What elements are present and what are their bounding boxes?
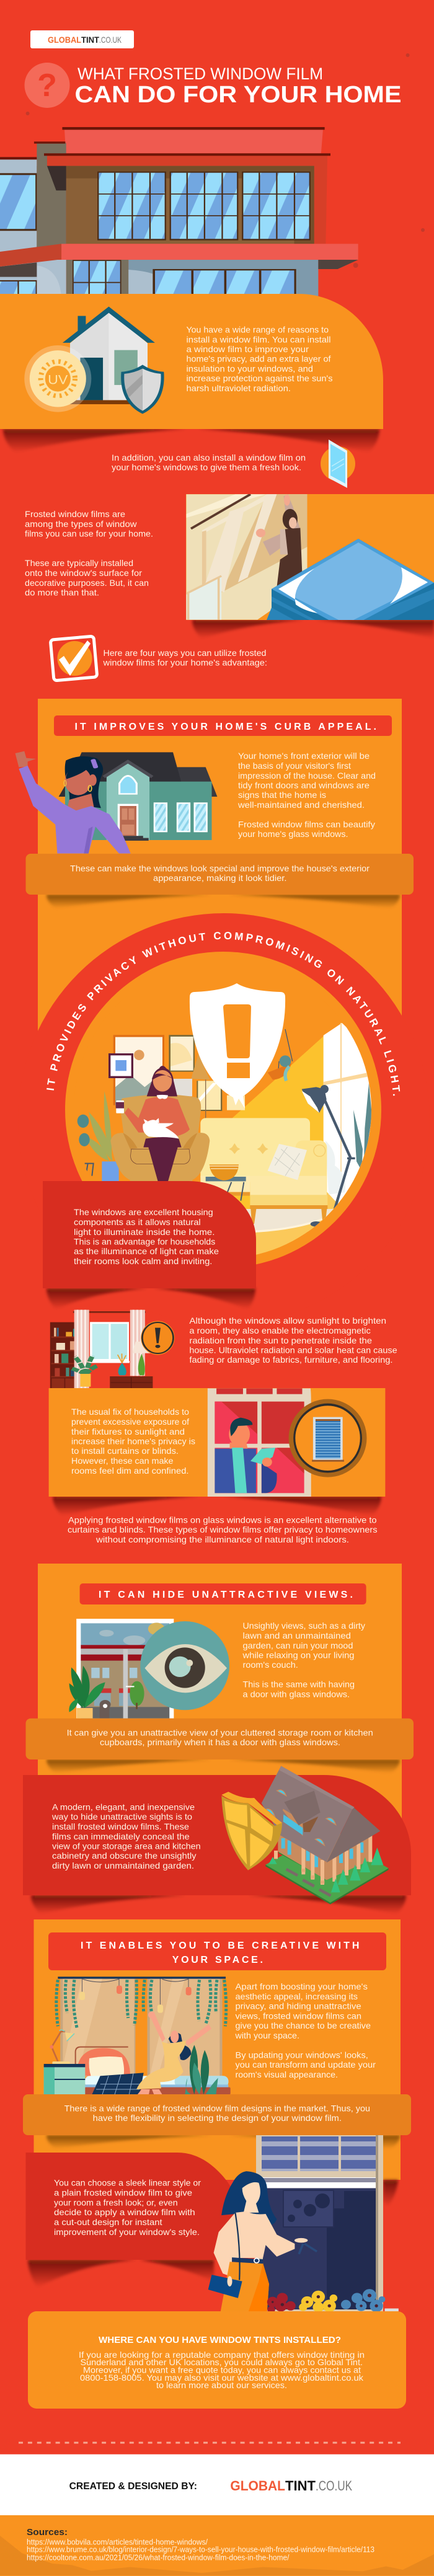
bed: [76, 2047, 231, 2094]
icon: house with UV and shield: UV: [48, 372, 68, 387]
panel: natural light text: as the illuminance of light can make: [74, 1246, 219, 1256]
panel: where to install: 0800-158-8005. You may also visit our website at www.globaltint.co.uk: [80, 2373, 364, 2383]
trees: [268, 1848, 383, 1892]
house: [59, 752, 217, 841]
text: four ways: Here are four ways you can utilize frosted: [103, 648, 267, 658]
potted plant: [185, 2045, 218, 2094]
panel: natural light text: The windows are excellent housing: [74, 1207, 213, 1217]
hanging lights: [79, 1978, 192, 2013]
text: creative paragraph: give you the chance to be creative: [236, 2021, 371, 2030]
text: creative paragraph: Apart from boosting your home's: [236, 1981, 368, 1991]
text: conceal paragraph: [51, 1802, 201, 1870]
heading: creative with your space: IT ENABLES YOU TO BE CREATIVE WITH: [81, 1941, 359, 1951]
panel: where to install: to learn more about our services.: [156, 2380, 287, 2390]
text: curtains and blinds: The usual fix of households to: [71, 1407, 189, 1417]
panel: where to install: If you are looking for a reputable company that offers window tinting in: [79, 2350, 365, 2360]
shadow: band 2: [46, 1759, 400, 1773]
nightstand: [44, 2064, 85, 2094]
panel: sources footer: https://www.bobvila.com/articles/tinted-home-windows/: [27, 2538, 208, 2547]
illustration: bedroom: [44, 1976, 231, 2094]
text: unsightly views: lawn and an unmaintained: [243, 1631, 351, 1640]
text: conceal paragraph: dirty lawn or unmaintained garden.: [52, 1861, 194, 1870]
plant and pot: [71, 1356, 97, 1387]
text: frosted films intro: These are typically installed: [25, 558, 133, 568]
text: intro paragraph: a window film to improve your: [186, 344, 309, 354]
shadow: curtains panel: [53, 1497, 381, 1516]
dormer: [279, 1790, 321, 1836]
text: intro paragraph: harsh ultraviolet radiation.: [186, 383, 291, 393]
panel: section 3 background: [38, 1564, 402, 1855]
text: intro paragraph: increase protection against the sun's: [186, 373, 332, 383]
text: creative paragraph: views, frosted window films can: [236, 2011, 361, 2021]
text: frosted films intro: films you can use for your home.: [25, 528, 153, 538]
shadow: design choices panel: [28, 2260, 214, 2288]
text: curb appeal paragraph: the basis of your visitor's first: [238, 761, 351, 771]
text: creative paragraph: [234, 1981, 376, 2079]
illustration: house and waving woman: [16, 751, 217, 854]
panel: credits: CREATED & DESIGNED BY:: [69, 2481, 197, 2492]
title: [74, 64, 402, 108]
text: conceal paragraph: A modern, elegant, and inexpensive: [52, 1802, 195, 1812]
callout band: curb appeal: These can make the windows look special and improve the house's exterior: [70, 863, 370, 873]
hanging plant: [268, 1029, 293, 1081]
roof windows: [265, 1790, 336, 1846]
text: curtains and blinds: [71, 1407, 195, 1476]
wall frames: [113, 1035, 164, 1105]
bookshelf: [50, 1322, 80, 1388]
text: curtains and blinds: increase their home's privacy is: [71, 1436, 195, 1446]
text: intro paragraph: install a window film. You can install: [186, 334, 331, 344]
text: conceal paragraph: install frosted window films. These: [52, 1821, 189, 1831]
strap: [235, 2213, 240, 2280]
door view: [76, 1619, 174, 1719]
panel: section 1 curb appeal and section 2 privacy background: [38, 699, 402, 1071]
panel: natural light text: light to illuminate inside the home.: [74, 1227, 215, 1237]
panel: where to install: Sunderland and other UK locations, you could always go to Global Tint.: [81, 2357, 363, 2367]
text: curtains and blinds: their fixtures to sunlight and: [71, 1427, 185, 1436]
icon: film stack: [267, 539, 434, 620]
small blue frame: [108, 1053, 133, 1078]
text: electromagnetic radiation: fading or damage to fabrics, furniture, and flooring.: [189, 1355, 393, 1365]
left plant: [78, 1091, 119, 1182]
heading: curb appeal: [54, 715, 392, 736]
callout band: storage view: [26, 1719, 414, 1759]
text: design choices paragraph: improvement of your window's style.: [54, 2227, 200, 2237]
blouse: [214, 2211, 294, 2276]
text: frosted films intro: among the types of window: [25, 519, 137, 529]
heading: creative with your space: [48, 1932, 386, 1970]
window: large left: [97, 172, 166, 241]
illustration: window behind woman: [256, 2135, 383, 2311]
sofa: [200, 1118, 327, 1224]
text: creative paragraph: By updating your windows' looks,: [236, 2050, 368, 2060]
heading: creative with your space: YOUR SPACE.: [172, 1955, 263, 1965]
text: unsightly views: Unsightly views, such as a dirty: [243, 1621, 365, 1631]
text: electromagnetic radiation: house. Ultraviolet radiation and solar heat can cause: [189, 1345, 397, 1355]
text: curb appeal paragraph: well-maintained and cherished.: [237, 800, 365, 810]
panel: natural light text: This is an advantage for households: [74, 1236, 215, 1246]
keys: [294, 2238, 317, 2254]
panel: natural light text: their rooms look calm and inviting.: [74, 1256, 212, 1266]
panel: intro shadow: [3, 429, 379, 453]
text: four ways: [102, 648, 267, 667]
text: design choices paragraph: [54, 2177, 201, 2237]
figure: man reading: [215, 1418, 277, 1493]
text: alternative to curtains: curtains and blinds. These types of window films offer privacy to homeowners: [68, 1525, 377, 1534]
text: frosted films intro: [25, 509, 153, 598]
text: alternative to curtains: Applying frosted window films on glass windows is an excellent alternative to: [68, 1515, 377, 1525]
text: electromagnetic radiation: a room, they also enable the electromagnetic: [189, 1326, 371, 1335]
icon: house with UV and shield: [24, 306, 164, 414]
text: design choices paragraph: a plain frosted window film to give: [54, 2187, 192, 2197]
panel shadow: installer: [192, 620, 434, 639]
skirt: [221, 2262, 269, 2311]
panel: sources footer: https://cooltone.com.au/2021/05/26/what-frosted-window-film-does-in-the-home/: [27, 2553, 290, 2562]
text: creative paragraph: with your space.: [234, 2030, 299, 2040]
shadow: band 3: [46, 2135, 400, 2149]
text: frosted films intro: onto the window's surface for: [25, 568, 142, 578]
text: intro paragraph: [186, 325, 332, 393]
title: WHAT FROSTED WINDOW FILM: [78, 64, 323, 83]
logo badge: .CO.UK: [99, 35, 122, 45]
text: curb appeal paragraph: [237, 751, 376, 839]
text: fresh look: In addition, you can also install a window film on: [112, 453, 306, 463]
callout band: storage view: It can give you an unattractive view of your cluttered storage room or kitchen: [67, 1727, 373, 1737]
text: curb appeal paragraph: signs that the home is: [238, 790, 326, 800]
text: frosted films intro: decorative purposes. But, it can: [25, 578, 149, 588]
text: alternative to curtains: without compromising the illuminance of natural light indoors.: [95, 1534, 349, 1544]
vines: [56, 1980, 226, 2029]
panel: curtains and blinds: [49, 1388, 385, 1497]
text: fresh look: [112, 453, 306, 472]
text: four ways: window films for your home's advantage:: [102, 657, 267, 667]
text: design choices paragraph: You can choose a sleek linear style or: [54, 2177, 201, 2187]
illustration: modern house: [0, 127, 358, 299]
panel: credits: GLOBAL: [230, 2478, 285, 2494]
console and vases: [110, 1342, 153, 1388]
illustration: isometric house and shield: [221, 1766, 389, 1905]
floor lamp: [302, 1085, 355, 1227]
icon: eye: [140, 1621, 229, 1710]
text: curtains and blinds: rooms feel dim and confined.: [71, 1466, 188, 1476]
icon: checkbox: [50, 636, 97, 681]
roof: [262, 1766, 380, 1862]
text: creative paragraph: privacy, and hiding unattractive: [236, 2001, 361, 2011]
logo badge: TINT: [81, 35, 99, 45]
text: design choices paragraph: a cut-out design for instant: [54, 2217, 162, 2227]
text: unsightly views: room's couch.: [243, 1660, 298, 1670]
logo badge: [30, 30, 134, 48]
text: conceal paragraph: way to hide unattractive sights is to: [51, 1812, 192, 1821]
window: left: [0, 173, 37, 231]
icon: question mark: ?: [37, 68, 57, 104]
figure: installer: [256, 494, 302, 587]
text: unsightly views: garden, can ruin your mood: [243, 1640, 353, 1650]
text: electromagnetic radiation: [189, 1316, 397, 1365]
text: intro paragraph: insulation to your windows, and: [186, 363, 313, 373]
shadow: room text panel: [46, 1288, 255, 1309]
curtains: [60, 1978, 222, 2076]
text: frosted films intro: Frosted window films are: [25, 509, 125, 519]
orange ring: [65, 952, 381, 1268]
text: creative paragraph: room's visual appearance.: [236, 2069, 338, 2079]
panel: sources footer: [0, 2515, 434, 2576]
icon: warning: [141, 1321, 175, 1355]
panel: sources footer: https://www.brume.co.uk/blog/interior-design/7-ways-to-sell-your-house-with-frosted-window-film/article/113: [27, 2546, 374, 2554]
hair: [221, 2171, 277, 2225]
hand: [227, 2276, 232, 2286]
panel: installer scene: [186, 494, 434, 620]
text: frosted films intro: do more than that.: [25, 588, 99, 598]
shield: [221, 1792, 282, 1870]
icon: exclamation shield: [190, 983, 285, 1109]
woman: [16, 751, 131, 854]
panel: natural light text: components as it allows natural: [74, 1217, 201, 1227]
shadow: red panel 3: [31, 1895, 406, 1914]
text: conceal paragraph: view of your storage area and kitchen: [52, 1841, 201, 1851]
callout band: curb appeal: [26, 854, 414, 895]
armchair: [110, 1094, 210, 1182]
decorative dots: [26, 53, 425, 268]
seated woman: [116, 1066, 190, 1182]
heading: privacy arc text: IT PROVIDES PRIVACY WITHOUT COMPROMISING ON NATURAL LIGHT.: [46, 932, 401, 1096]
panel: credits: TINT: [285, 2478, 316, 2494]
illustration: man at window with blind icon: [208, 1388, 366, 1497]
window: [89, 1322, 130, 1363]
panel: credits: [0, 2454, 434, 2515]
text: curb appeal paragraph: Your home's front exterior will be: [238, 751, 370, 761]
logo badge: GLOBAL: [48, 35, 81, 45]
text: unsightly views: This is the same with having: [243, 1679, 355, 1689]
panel: where to install: WHERE CAN YOU HAVE WINDOW TINTS INSTALLED?: [99, 2335, 341, 2345]
heading: curb appeal: IT IMPROVES YOUR HOME'S CURB APPEAL.: [74, 722, 376, 732]
panel: where to install: [28, 2311, 406, 2409]
face: [242, 2182, 260, 2213]
text: curtains and blinds: However, these can make: [71, 1456, 174, 1466]
text: curb appeal paragraph: Frosted window films can beautify: [238, 820, 375, 830]
text: design choices paragraph: your room a fresh look; or, even: [54, 2197, 178, 2207]
panel: credits: .CO.UK: [316, 2478, 352, 2494]
callout band: design range: [23, 2094, 411, 2135]
panel: design choices: [26, 2153, 248, 2260]
illustration: door view with eye: [69, 1619, 229, 1719]
window: large right: [242, 172, 311, 241]
arch: red circle: [18, 913, 430, 1325]
illustration: living room: [77, 1023, 371, 1255]
text: unsightly views: while relaxing on your living: [242, 1650, 355, 1660]
callout band: curb appeal: appearance, making it look tidier.: [153, 873, 286, 883]
text: curb appeal paragraph: tidy front doors and windows are: [238, 780, 370, 790]
text: intro paragraph: home's privacy, add an extra layer of: [186, 353, 331, 363]
text: electromagnetic radiation: Although the windows allow sunlight to brighten: [189, 1316, 386, 1326]
handbag: [208, 2275, 242, 2298]
text: curb appeal paragraph: impression of the house. Clear and: [238, 771, 376, 781]
illustration: room with warning: [50, 1310, 175, 1388]
lamp: [50, 2030, 74, 2065]
callout band: design range: There is a wide range of frosted window film designs in the market. Thus, you: [64, 2103, 370, 2113]
title: CAN DO FOR YOUR HOME: [74, 82, 402, 108]
icon: blind in circle: [289, 1399, 366, 1477]
text: alternative to curtains: [68, 1515, 377, 1544]
panel: frosted film conceal: [23, 1775, 411, 1895]
text: unsightly views: a door with glass windows.: [243, 1689, 350, 1699]
panel: sources footer: Sources:: [27, 2527, 68, 2538]
floor: [246, 1209, 334, 1232]
window: large middle: [170, 172, 238, 241]
heading: unattractive views: IT CAN HIDE UNATTRACTIVE VIEWS.: [99, 1590, 353, 1600]
land: [265, 1832, 389, 1905]
flowers: [267, 2289, 385, 2313]
illustration: woman with keys and flowers: [208, 2171, 399, 2313]
shadow: right of window: [383, 2180, 398, 2207]
panel: section 4 background: [33, 1919, 401, 2180]
callout band: design range: have the flexibility in selecting the design of your window film.: [93, 2113, 342, 2123]
text: fresh look: your home's windows to give them a fresh look.: [112, 463, 301, 472]
text: creative paragraph: aesthetic appeal, increasing its: [236, 1991, 358, 2001]
text: conceal paragraph: films can immediately conceal the: [52, 1831, 190, 1841]
panel: natural light text: [43, 1181, 256, 1288]
text: design choices paragraph: decide to apply a window film with: [54, 2207, 195, 2217]
text: intro paragraph: You have a wide range of reasons to: [186, 325, 329, 335]
potted plant and cat: [69, 1666, 111, 1719]
text: curtains and blinds: to install curtains or blinds.: [71, 1446, 179, 1456]
text: curb appeal paragraph: your home's glass windows.: [238, 829, 348, 839]
text: curtains and blinds: prevent excessive exposure of: [71, 1417, 189, 1427]
belt: [232, 2257, 263, 2264]
icon: question mark: [25, 63, 69, 108]
icon: window: [321, 440, 355, 488]
text: electromagnetic radiation: radiation from the sun to penetrate inside the: [189, 1335, 372, 1345]
callout band: storage view: cupboards, primarily when it has a door with glass windows.: [100, 1737, 340, 1747]
text: unsightly views: [242, 1621, 365, 1699]
shadow: band 1: [46, 895, 400, 908]
text: creative paragraph: you can transform and update your: [236, 2060, 376, 2069]
curtains: [74, 1310, 145, 1388]
woman stretching: [136, 2012, 211, 2094]
text: conceal paragraph: cabinetry and obscure the unsightly: [52, 1851, 196, 1861]
benches: [286, 1869, 330, 1896]
building: [276, 1834, 370, 1885]
panel: where to install: Moreover, if you want a free quote today, you can always contact us at: [83, 2365, 361, 2375]
panel: intro: [0, 294, 383, 429]
heading: unattractive views: [80, 1583, 366, 1604]
bowl and table: [206, 1164, 246, 1201]
